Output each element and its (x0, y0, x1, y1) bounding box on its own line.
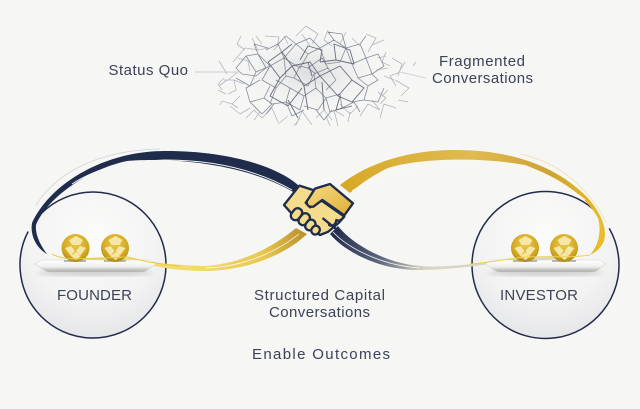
investor label: INVESTOR (500, 287, 578, 304)
structured capital conversations (254, 287, 385, 321)
investor shelf (485, 260, 606, 276)
structured capital conversations: Structured Capital (254, 287, 385, 304)
founder label: FOUNDER (57, 287, 132, 304)
founder shelf (34, 260, 156, 276)
founder coin 2 (101, 234, 129, 262)
investor circle (445, 165, 640, 365)
investor coin 1 (511, 234, 539, 262)
thin gold line across founder shelf (52, 254, 180, 266)
network cloud: fragmented conversations (218, 26, 416, 126)
fragmented conversations label: Fragmented (439, 53, 525, 70)
ribbon: navy from handshake to investor shelf (330, 226, 590, 270)
status quo label: Status Quo (108, 62, 188, 79)
fragmented conversations label (400, 53, 533, 87)
ribbon: gold from handshake to investor (340, 150, 606, 255)
founder circle (0, 162, 196, 368)
enable outcomes: Enable Outcomes (252, 346, 390, 363)
structured capital conversations: Conversations (269, 304, 370, 321)
ribbon: gold from founder shelf to handshake (52, 228, 307, 271)
icon: handshake (284, 184, 353, 236)
fragmented conversations label: Conversations (432, 70, 533, 87)
investor coin 2 (550, 234, 578, 262)
thin gold line across investor shelf (470, 255, 590, 264)
status quo label (108, 62, 240, 79)
ribbon: navy from founder to handshake (32, 149, 298, 254)
founder coin 1 (62, 234, 90, 262)
